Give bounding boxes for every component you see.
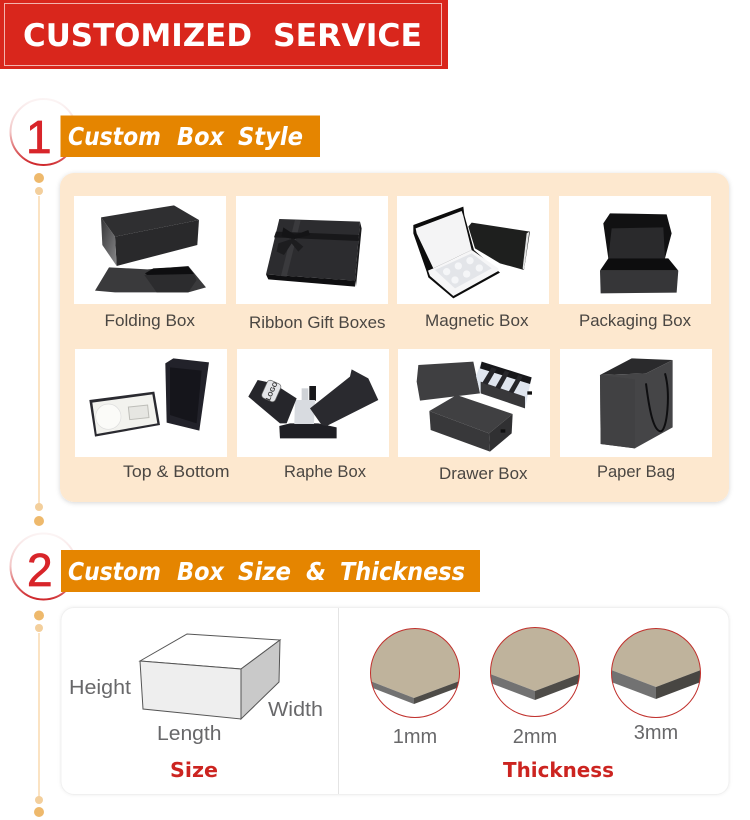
label: 2mm: 2mm: [513, 726, 557, 748]
panel: size and thickness: [61, 608, 729, 794]
heading: Custom Box Size & Thickness: [61, 550, 480, 592]
label: 1mm: 1mm: [393, 726, 437, 748]
number badge 2: [10, 534, 76, 600]
caption: Size: Size: [170, 758, 218, 782]
header banner: [0, 0, 448, 69]
label: Packaging Box: Packaging Box: [579, 311, 691, 330]
header banner: SERVICE: [273, 18, 422, 54]
item: magnetic box: [397, 196, 549, 304]
item: drawer box: [398, 349, 550, 457]
label: Folding Box: Folding Box: [104, 311, 195, 330]
diagram: box dimensions: [140, 634, 280, 719]
header banner: CUSTOMIZED: [23, 18, 252, 54]
thickness sample: 1mm: [370, 628, 460, 718]
label: Length: Length: [157, 723, 222, 745]
label: Width: Width: [268, 699, 323, 721]
caption: Thickness: Thickness: [503, 758, 614, 782]
label: Top & Bottom: Top & Bottom: [123, 462, 230, 481]
number badge 2: 2: [27, 544, 53, 596]
number badge 1: 1: [26, 111, 52, 163]
item: ribbon gift box: [236, 196, 388, 304]
label: Ribbon Gift Boxes: Ribbon Gift Boxes: [249, 313, 386, 332]
thickness sample: 3mm: [611, 628, 701, 718]
heading: Custom Box Size & Thickness: Box: [177, 557, 225, 586]
heading: Custom Box Style: [60, 116, 320, 157]
item: packaging box: [559, 196, 711, 304]
heading: Custom Box Size & Thickness: &: [306, 557, 326, 586]
timeline: section 2: [34, 610, 44, 817]
item: raphe box: LOGO: [265, 381, 280, 402]
thickness sample: 2mm: [490, 627, 580, 717]
label: Raphe Box: Raphe Box: [284, 462, 366, 481]
item: raphe box: [237, 349, 389, 457]
heading: Custom Box Style: Custom: [68, 122, 161, 151]
heading: Custom Box Size & Thickness: Thickness: [340, 557, 465, 586]
label: Drawer Box: Drawer Box: [439, 464, 528, 483]
label: 3mm: 3mm: [634, 722, 678, 744]
heading: Custom Box Style: Style: [238, 122, 303, 151]
heading: Custom Box Size & Thickness: Custom: [68, 557, 161, 586]
label: Height: Height: [69, 677, 131, 699]
label: Paper Bag: Paper Bag: [597, 462, 675, 481]
label: Magnetic Box: Magnetic Box: [425, 311, 529, 330]
heading: Custom Box Size & Thickness: Size: [238, 557, 291, 586]
timeline: section 1: [34, 173, 44, 526]
item: folding box: [74, 196, 226, 304]
item: paper bag: [560, 349, 712, 457]
number badge 1: [10, 99, 76, 165]
item: top and bottom box: [75, 349, 227, 457]
heading: Custom Box Style: Box: [177, 122, 225, 151]
panel: box styles: [60, 173, 729, 502]
